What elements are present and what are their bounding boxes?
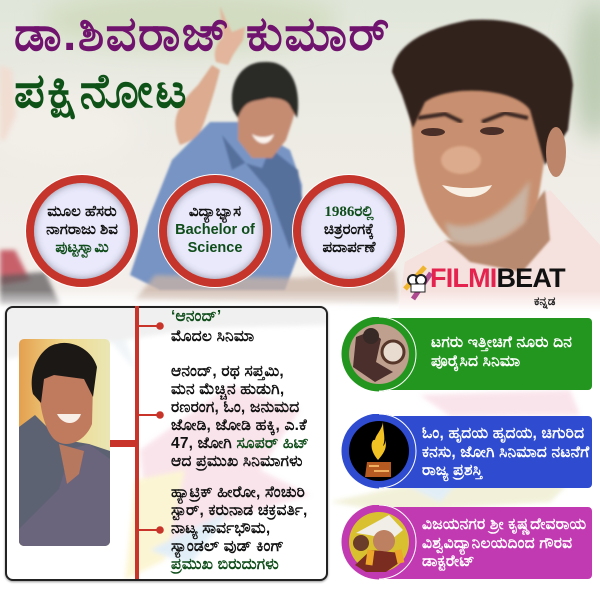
badge text: ಮೂಲ ಹೆಸರು xyxy=(47,203,117,220)
timeline text: first film xyxy=(171,308,254,345)
card: green xyxy=(342,317,592,392)
timeline text: titles: ಸ್ಟಾರ್, ಕರುನಾಡ ಚಕ್ರವರ್ತಿ, xyxy=(171,502,308,519)
badge text: ನಾಗರಾಜು ಶಿವ xyxy=(46,221,118,238)
timeline text: titles: ಪ್ರಮುಖ ಬಿರುದುಗಳು xyxy=(171,556,279,573)
card text xyxy=(422,425,590,482)
timeline text: hit films: ಮನ ಮೆಚ್ಚಿನ ಹುಡುಗಿ, xyxy=(171,381,284,398)
icon: honorary doctorate photo xyxy=(342,505,416,580)
logo language label: ಕನ್ನಡ xyxy=(534,294,555,308)
card text: ಟಗರು ಇತ್ತೀಚಿಗೆ ನೂರು ದಿನ xyxy=(431,334,572,351)
badge: original name xyxy=(25,174,139,288)
icon: film still xyxy=(342,317,416,392)
title line 2: ಪಕ್ಷಿನೋಟ xyxy=(14,65,189,118)
badge text xyxy=(322,204,376,256)
timeline text: titles: ನಾಟ್ಯ ಸಾರ್ವಭೌಮ, xyxy=(171,520,270,537)
timeline text: hit films xyxy=(171,363,309,471)
card text xyxy=(431,334,572,372)
card text: ಕನಸು, ಜೋಗಿ ಸಿನಿಮಾದ ನಟನೆಗೆ xyxy=(422,444,589,460)
right portrait xyxy=(392,20,600,312)
branch: first film xyxy=(139,322,164,330)
logo wordmark: FILMIBEAT xyxy=(430,263,565,293)
badge text: Bachelor of xyxy=(175,222,255,238)
icon: film camera xyxy=(403,265,432,300)
branch: titles xyxy=(139,526,164,534)
badge text: ಪದಾರ್ಪಣೆ xyxy=(323,239,375,256)
card text xyxy=(422,516,586,571)
card text: ವಿಶ್ವವಿದ್ಯಾನಿಲಯದಿಂದ ಗೌರವ xyxy=(422,534,572,552)
panel: career timeline xyxy=(5,306,328,581)
timeline text: hit films: 47, ಜೋಗಿ ಸೂಪರ್ ಹಿಟ್ xyxy=(171,435,309,452)
badge text: Science xyxy=(188,240,242,256)
badge text xyxy=(175,203,255,256)
badge: education xyxy=(158,174,272,288)
logo: FilmiBeat xyxy=(403,263,566,309)
timeline text: titles xyxy=(170,484,308,574)
timeline text: hit films: ಜೋಡಿ, ಜೋಡಿ ಹಕ್ಕಿ, ಎ.ಕೆ xyxy=(171,417,307,434)
timeline text: titles: ಸ್ಯಾಂಡಲ್ ವುಡ್ ಕಿಂಗ್ xyxy=(171,538,284,555)
badge text: ಚಿತ್ರರಂಗಕ್ಕೆ xyxy=(324,221,374,238)
badge text: ವಿದ್ಯಾಭ್ಯಾಸ xyxy=(189,203,241,220)
photo connector xyxy=(109,440,137,447)
card text: ಡಾಕ್ಟರೇಟ್ xyxy=(422,553,475,570)
title line 1: ಡಾ.ಶಿವರಾಜ್ ಕುಮಾರ್ xyxy=(14,8,391,61)
timeline text: first film: ‘ಆನಂದ್’ xyxy=(171,308,221,325)
icon: award flame xyxy=(342,414,416,488)
timeline text: titles: ಹ್ಯಾಟ್ರಿಕ್ ಹೀರೋ, ಸೆಂಚುರಿ xyxy=(171,484,305,501)
badge text: ಪುಟ್ಟಸ್ವಾಮಿ xyxy=(55,239,109,256)
card text: ವಿಜಯನಗರ ಶ್ರೀ ಕೃಷ್ಣದೇವರಾಯ xyxy=(422,516,586,533)
portrait photo xyxy=(19,339,110,546)
card: blue xyxy=(342,414,592,488)
branch: hit films xyxy=(139,411,164,419)
timeline spine xyxy=(135,306,139,579)
paint splash decoration xyxy=(7,308,326,579)
raised-arm man xyxy=(130,6,303,290)
badge: debut xyxy=(292,174,406,288)
badge text: 1986ರಲ್ಲಿ xyxy=(324,204,374,220)
card text: ರಾಜ್ಯ ಪ್ರಶಸ್ತಿ xyxy=(422,462,482,479)
card text: ಓಂ, ಹೃದಯ ಹೃದಯ, ಚಿಗುರಿದ xyxy=(422,425,584,442)
timeline text: hit films: ರಣರಂಗ, ಓಂ, ಜನುಮದ xyxy=(171,399,299,416)
card: purple xyxy=(342,505,592,580)
paint splashes around cards xyxy=(334,390,580,509)
badge text xyxy=(46,203,118,258)
timeline text: hit films: ಆನಂದ್, ರಥ ಸಪ್ತಮಿ, xyxy=(171,363,284,380)
timeline text: first film: ಮೊದಲ ಸಿನಿಮಾ xyxy=(171,328,254,345)
timeline text: hit films: ಆದ ಪ್ರಮುಖ ಸಿನಿಮಾಗಳು xyxy=(171,453,303,470)
card text: ಪೂರೈಸಿದ ಸಿನಿಮಾ xyxy=(431,353,520,370)
